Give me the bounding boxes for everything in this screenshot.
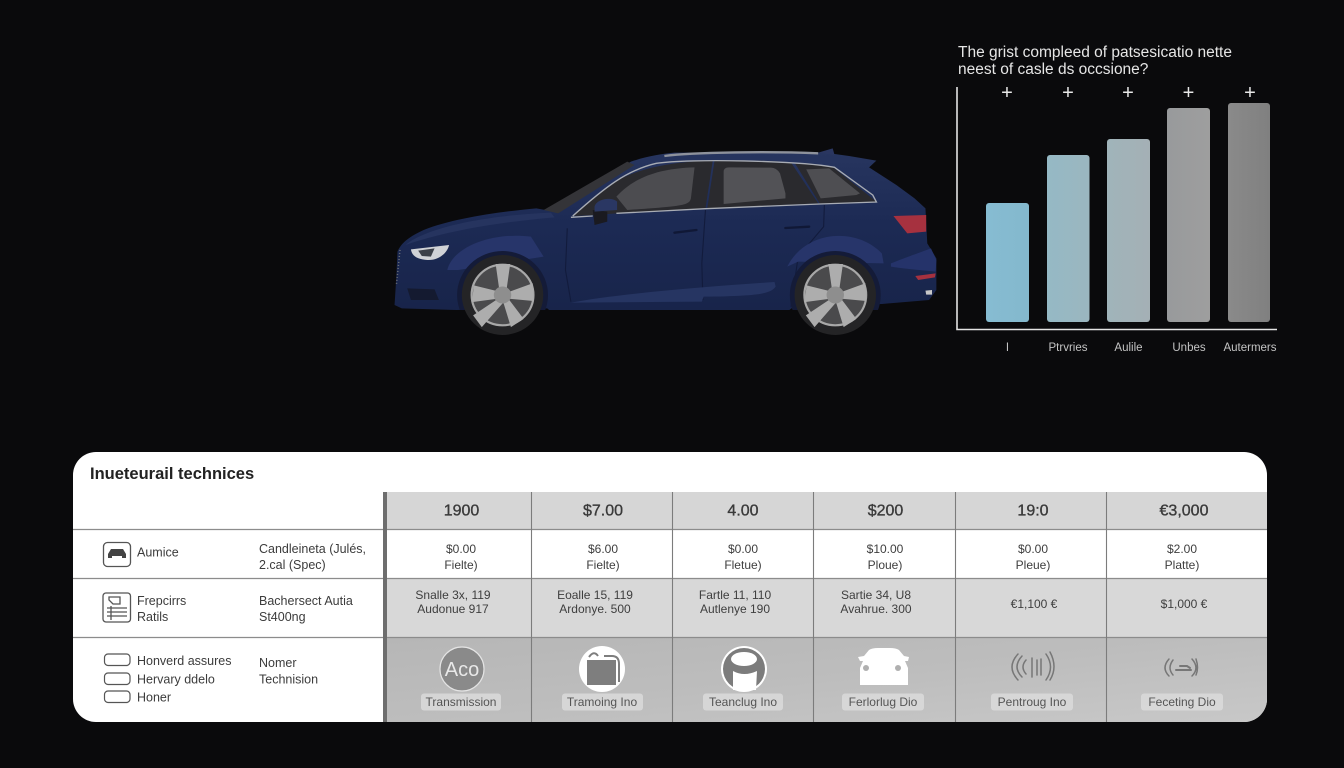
price row: [444, 542, 1199, 572]
header row values: 4.00: [727, 502, 759, 520]
price row: Platte): [1165, 558, 1199, 572]
price row: $6.00: [588, 542, 618, 556]
details row: Autlenye 190: [700, 602, 770, 616]
grille and front vent: [396, 250, 400, 285]
panel: comparison table: [73, 452, 1267, 722]
price row: $10.00: [867, 542, 904, 556]
icon: signal: [1165, 659, 1198, 676]
price row: Fletue): [724, 558, 762, 572]
door handles: [675, 227, 809, 233]
chart title: neest of casle ds occsione?: [958, 61, 1149, 78]
details row: Fartle 11, 110: [699, 588, 771, 602]
row labels: Aumice: [137, 546, 179, 560]
icon labels: Feceting Dio: [1148, 695, 1216, 709]
icon labels: Teanclug Ino: [709, 695, 777, 709]
tail light: [893, 215, 926, 233]
details row: Sartie 34, U8: [841, 588, 911, 602]
wheel arches: [457, 251, 548, 339]
price row: Fielte): [444, 558, 478, 572]
details row: €1,100 €: [1011, 597, 1058, 611]
row labels: Candleineta (Julés,: [259, 542, 366, 556]
plus markers: +: [1122, 82, 1134, 104]
icon labels: Transmission: [426, 695, 496, 709]
header row values: $200: [868, 502, 903, 520]
details row: Eoalle 15, 119: [557, 588, 633, 602]
header row values: 19:0: [1017, 502, 1049, 520]
details row: Ardonye. 500: [559, 602, 631, 616]
row labels: Technision: [259, 672, 318, 686]
row labels: 2.cal (Spec): [259, 558, 326, 572]
table heading: Inueteurail technices: [90, 465, 254, 483]
header row values: 1900: [444, 502, 479, 520]
price row: $0.00: [446, 542, 476, 556]
bonnet highlight: [405, 213, 555, 245]
chart title: [958, 44, 1232, 78]
wing mirror: [593, 210, 607, 225]
axis labels: Autermers: [1223, 342, 1277, 354]
chart title: The grist compleed of patsesicatio nette: [958, 44, 1232, 61]
headlight: [411, 245, 449, 260]
icon labels: Tramoing Ino: [567, 695, 637, 709]
price row: $0.00: [1018, 542, 1048, 556]
icon labels: Pentroug Ino: [998, 695, 1067, 709]
icon: car front: [858, 648, 909, 685]
row labels: Honverd assures: [137, 654, 232, 668]
rear bumper highlight: [891, 248, 936, 272]
icon: Aco badge: [440, 647, 484, 691]
icon: car badge: [104, 542, 130, 566]
plus markers: +: [1001, 82, 1013, 104]
axis labels: Unbes: [1172, 342, 1206, 354]
car illustration: [395, 148, 936, 343]
plus markers: [1001, 82, 1256, 104]
wheel arch highlights: [447, 236, 544, 270]
details row: [415, 588, 1208, 616]
icon labels: Ferlorlug Dio: [849, 695, 918, 709]
header row values: $7.00: [583, 502, 623, 520]
details row: $1,000 €: [1161, 597, 1208, 611]
axes: [957, 87, 1277, 330]
sill highlight: [571, 282, 776, 303]
car body: [395, 153, 936, 312]
icon: seat: [721, 646, 767, 692]
header row values: €3,000: [1160, 502, 1209, 520]
plus markers: +: [1062, 82, 1074, 104]
price row: $0.00: [728, 542, 758, 556]
price row: Pleue): [1016, 558, 1050, 572]
icon: parts badge: [103, 593, 130, 622]
row labels: St400ng: [259, 610, 306, 624]
bars: [986, 103, 1270, 322]
details row: Audonue 917: [417, 602, 489, 616]
icon: sound waves: [1012, 652, 1054, 680]
plus markers: +: [1183, 82, 1194, 104]
price row: $2.00: [1167, 542, 1197, 556]
option checkboxes: [104, 654, 130, 702]
row labels: Bachersect Autia: [259, 594, 353, 608]
bar chart: [957, 82, 1277, 354]
axis labels: [1006, 342, 1277, 354]
details row: Snalle 3x, 119: [415, 588, 491, 602]
header row values: [444, 502, 1209, 520]
row labels: Nomer: [259, 656, 297, 670]
windows: [573, 161, 713, 216]
icon labels: [421, 694, 1223, 710]
row labels: Frepcirrs: [137, 594, 186, 608]
row labels: Ratils: [137, 610, 168, 624]
row labels: Hervary ddelo: [137, 672, 215, 686]
icon: Aco badge: Aco: [445, 659, 479, 681]
price row: Fielte): [586, 558, 620, 572]
plus markers: +: [1244, 82, 1256, 104]
row labels: [103, 542, 366, 704]
roof rail: [664, 152, 818, 156]
door seams: [565, 205, 824, 307]
rear wheel: [795, 255, 876, 335]
price row: Ploue): [868, 558, 902, 572]
axis labels: Ptrvries: [1049, 342, 1088, 354]
axis labels: I: [1006, 342, 1009, 354]
axis labels: Aulile: [1114, 342, 1143, 354]
windshield: [544, 162, 635, 213]
icon: battery: [579, 646, 625, 692]
front wheel: [462, 255, 543, 335]
cover below body: [453, 310, 889, 343]
window chrome: [571, 161, 876, 217]
row labels: Honer: [137, 690, 171, 704]
details row: Avahrue. 300: [840, 602, 912, 616]
